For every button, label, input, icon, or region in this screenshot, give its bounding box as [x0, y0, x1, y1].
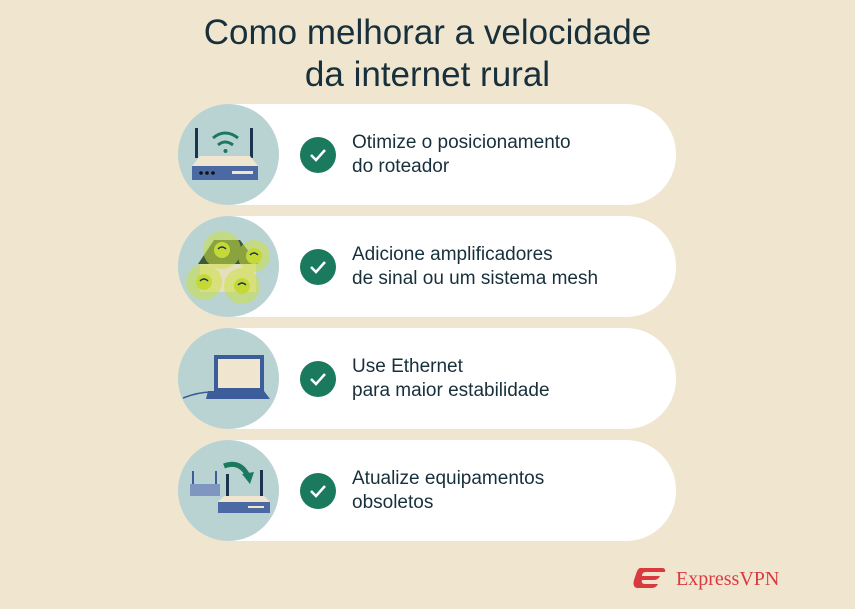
row 2: mesh [178, 216, 676, 317]
text: de sinal ou um sistema mesh [352, 268, 598, 289]
row 1: router placement [178, 104, 676, 205]
text: do roteador [352, 156, 449, 177]
icon: house with mesh [178, 216, 279, 317]
icon: router [178, 104, 279, 205]
text: Otimize o posicionamento [352, 132, 571, 153]
text [352, 468, 544, 513]
icon: laptop [178, 328, 279, 429]
text: para maior estabilidade [352, 380, 550, 401]
icon: check [300, 473, 336, 509]
icon: check [300, 137, 336, 173]
text: Use Ethernet [352, 356, 463, 377]
text [352, 356, 550, 401]
text: Atualize equipamentos [352, 468, 544, 489]
icon: check [300, 249, 336, 285]
title: Como melhorar a velocidade [204, 13, 651, 52]
row 4: upgrade [178, 440, 676, 541]
title [204, 13, 651, 94]
text: Adicione amplificadores [352, 244, 553, 265]
text [352, 244, 598, 289]
icon: check [300, 361, 336, 397]
row 3: ethernet [178, 328, 676, 429]
icon: router upgrade [178, 440, 279, 541]
text: obsoletos [352, 492, 433, 513]
logo: ExpressVPN: ExpressVPN [676, 568, 779, 590]
title: da internet rural [305, 55, 550, 94]
text [352, 132, 571, 177]
